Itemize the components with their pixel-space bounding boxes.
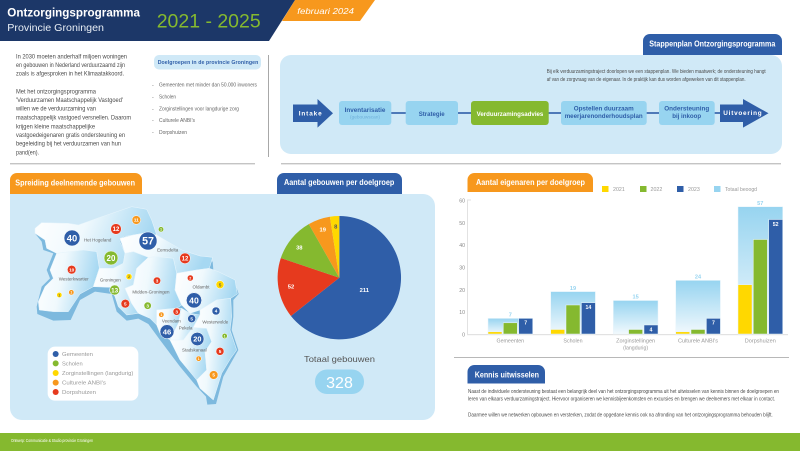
region: Westerwolde [193,298,237,400]
intro text: 'Verduurzamen Maatschappelijk Vastgoed' [16,98,123,104]
region: Westerkwartier [38,250,99,312]
arrow: uitvoering [720,99,768,128]
bars: gemeenten [488,312,533,334]
tab: aantal gebouwen heading: Aantal gebouwen per doelgroep [284,178,395,187]
tab: spreiding heading [10,173,142,194]
region: Pekela [170,308,200,340]
bars: culturele ANBI's [676,275,720,334]
step: onderhoudsplan: Opstellen duurzaam [574,106,634,112]
bars: culturele ANBI's: 24 [695,275,702,281]
doelgroepen list: - [152,95,154,101]
y axis: 40 [459,243,465,249]
y axis: 20 [459,288,465,294]
step: strategie [406,101,458,125]
map labels: Westerkwartier [59,277,89,282]
bars: dorpshuizen: 52 [773,222,779,228]
map marker numbers: 1 [160,313,162,317]
region: Oldambt [175,268,237,313]
map marker numbers: 2 [189,276,191,280]
panel: doelgroepen heading: Doelgroepen in de provincie Groningen [158,60,258,66]
map markers: gemeenten [64,230,220,346]
step: inventarisatie: (gebouwscan) [350,115,380,121]
total buildings value [315,370,364,394]
intro text: vastgoedeigenaren gratis ondersteuning en [16,133,125,139]
total buildings label: Totaal gebouwen [304,354,375,364]
kennis uitwisselen text [468,389,779,419]
region: Groningen [93,252,148,315]
map labels: Het Hogeland [84,238,112,243]
map marker numbers: 40 [67,233,77,243]
tab: stappenplan heading: Stappenplan Ontzorgingsprogramma [649,40,776,48]
doelgroepen list: Gemeenten met minder dan 50.000 inwoners [159,83,257,89]
map markers: zorginstellingen [57,274,224,298]
doelgroepen list: - [152,83,154,89]
intro text [15,54,131,156]
region: Het Hogeland [35,207,157,268]
map marker numbers: 5 [212,373,215,378]
category labels [496,338,776,352]
map markers: dorpshuizen [67,224,224,355]
doelgroepen list: - [152,130,154,136]
category labels: Dorpshuizen [745,338,776,344]
map labels: Midden-Groningen [132,289,170,294]
chart legend: 2022 [650,187,662,193]
step: inventarisatie [339,101,391,125]
bars: zorginstellingen [613,295,658,334]
pie chart: 19 [319,227,327,233]
step: inventarisatie: Inventarisatie [345,107,386,114]
y axis: 10 [459,310,465,316]
doelgroepen list: Scholen [159,95,176,101]
bars: gemeenten: 7 [524,320,527,326]
y axis: 50 [459,221,465,227]
tab: aantal gebouwen heading [277,173,402,194]
map marker numbers: 4 [215,309,218,314]
map labels: Stadskanaal [182,348,207,353]
bars: scholen: 14 [586,305,591,311]
intro text: willen we de verduurzaming van [15,107,96,113]
tab: aantal eigenaren heading: Aantal eigenaren per doelgroep [476,178,585,187]
bars: zorginstellingen: 15 [632,295,639,301]
doelgroepen list: Culturele ANBI's [159,118,195,124]
map legend: Culturele ANBI's [62,381,106,387]
pie chart: 211 [360,288,370,294]
map marker numbers: 13 [111,287,119,294]
bars: scholen [551,286,595,334]
doelgroepen list: - [152,118,154,124]
panel: map and pie background [10,194,435,420]
intro text: In 2030 moeten anderhalf miljoen woningen [16,54,127,60]
map labels [59,238,229,353]
step: verduurzamingsadvies [471,101,549,125]
map legend: Dorpshuizen [62,390,96,396]
chart legend: 2021 [613,187,625,193]
map marker numbers [58,218,226,378]
stappenplan description: Bij elk verduurzamingstraject doorlopen we een stappenplan. We bieden maatwerk; de ondersteuning hangt [547,69,766,75]
map legend: Scholen [62,361,83,367]
y axis [459,198,465,338]
map markers: culturele ANBI's [69,216,218,379]
doelgroepen list: Dorpshuizen [159,130,187,136]
map marker numbers: 40 [189,295,199,305]
map marker numbers: 5 [124,301,127,306]
kennis uitwisselen text: Naast de individuele ondersteuning bestaat een belangrijk deel van het ontzorgingsprogramma uit het uitwisselen van kennis binnen de doelgroepen en [468,389,779,395]
map labels: Oldambt [193,284,210,289]
map marker numbers: 57 [142,236,154,248]
kennis uitwisselen text: leren van elkaars verduurzamingstraject. Hiervoor organiseren we kennisbijeenkomsten en excursies en brengen we deelnemers met elkaar in contact. [468,397,775,403]
map marker numbers: 20 [107,254,116,263]
chart legend [602,186,757,193]
map marker numbers: 1 [198,357,200,361]
map marker numbers: 1 [70,291,72,295]
y axis: 0 [462,332,465,338]
map marker numbers: 1 [224,334,226,338]
map marker numbers: 1 [160,228,162,232]
map marker numbers: 46 [163,327,171,336]
map marker numbers: 5 [219,282,222,287]
kennis uitwisselen text: Daarmee willen we netwerken opbouwen en versterken, zodat de opgedane kennis ook na afronding van het ontzorgingsprogramma behouden blijft. [468,413,773,419]
bars: culturele ANBI's: 7 [712,320,715,326]
map marker numbers: 11 [134,218,139,224]
step: ondersteuning: Ondersteuning [664,106,709,112]
map legend: Zorginstellingen (langdurig) [62,371,133,377]
step: verduurzamingsadvies: Verduurzamingsadvies [477,111,544,118]
map marker numbers: 3 [175,309,178,314]
pie chart: 8 [334,225,338,231]
doelgroepen list: - [152,106,154,112]
map markers: scholen [104,227,227,339]
map labels: Eemsdelta [157,247,179,252]
title: Ontzorgingsprogramma [7,8,141,20]
header banner [0,0,375,41]
map legend [48,347,138,401]
subtitle: Provincie Groningen [7,22,104,34]
category labels: Gemeenten [496,338,524,344]
step: strategie: Strategie [419,111,445,118]
step: ondersteuning [659,101,715,125]
category labels: Scholen [563,338,583,344]
map marker numbers: 10 [69,267,75,272]
y axis: 30 [459,266,465,272]
intro text: zoals is afgesproken in het Klimaatakkoord. [16,72,124,78]
intro text: en gebouwen in Nederland verduurzaamd zijn [16,63,125,69]
map marker numbers: 5 [219,349,222,354]
region: Eemsdelta [120,233,213,273]
map marker numbers: 3 [146,303,149,308]
stappenplan description: af van de zorgvraag van de eigenaar. In de praktijk kan dus worden afgeweken van dit stappenplan. [547,77,746,83]
step: onderhoudsplan: meerjarenonderhoudsplan [565,113,643,120]
tab: kennis uitwisselen heading: Kennis uitwisselen [475,371,539,380]
map marker numbers: 5 [190,316,193,321]
doelgroepen list [152,83,257,136]
footer: Ontwerp: Communicatie & Studio provincie Groningen [11,438,93,444]
footer [0,433,800,451]
step: onderhoudsplan [561,101,647,125]
map marker numbers: 20 [193,335,201,344]
chart legend: 2023 [688,187,700,193]
arrow: intake [293,99,333,128]
chart legend: Totaal beoogd [725,187,757,193]
map labels: Westerwolde [202,319,229,324]
intro text: maatschappelijk vastgoed versnellen. Daarom [16,115,131,121]
intro text: Met het ontzorgingsprogramma [16,89,97,95]
map labels: Veendam [162,318,181,323]
bars: dorpshuizen: 57 [757,201,763,207]
panel: doelgroepen heading [154,55,261,70]
years: 2021 - 2025 [157,10,261,32]
pie chart: 38 [296,246,303,252]
map of Groningen [35,207,239,405]
panel: stappenplan [280,34,782,154]
intro text: pand(en). [16,150,39,156]
bars: scholen: 19 [570,286,576,292]
tab: stappenplan heading [643,34,782,55]
stappenplan description [547,69,766,83]
bars: gemeenten: 7 [509,312,512,318]
category labels: Culturele ANBI's [678,338,718,344]
total buildings value: 328 [326,375,353,392]
bar chart [459,198,788,352]
map marker numbers: 1 [58,293,60,297]
arrow: uitvoering: Uitvoering [723,110,762,117]
pie chart: 52 [288,285,294,291]
category labels: (langdurig) [623,346,648,352]
bars: zorginstellingen: 4 [650,328,653,334]
tab: spreiding heading: Spreiding deelnemende gebouwen [15,178,135,187]
intro text: begeleiding bij het verduurzamen van hun [16,142,121,148]
map marker numbers: 12 [113,227,120,233]
tab: aantal eigenaren heading [468,173,593,192]
pie chart [278,216,401,339]
map labels: Pekela [179,326,193,331]
date: februari 2024 [297,6,354,16]
tab: kennis uitwisselen heading [468,365,545,384]
map legend: Gemeenten [62,352,93,358]
map marker numbers: 3 [156,278,159,283]
doelgroepen list: Zorginstellingen voor langdurige zorg [159,106,239,112]
region: Midden-Groningen [125,257,182,325]
step: ondersteuning: bij inkoop [672,113,701,120]
arrow: intake: Intake [299,111,322,118]
category labels: Zorginstellingen [616,338,655,344]
map shadow [35,213,239,405]
y axis: 60 [459,198,465,204]
map marker numbers: 12 [182,256,189,262]
map marker numbers: 2 [128,275,130,279]
region: Veendam [157,308,182,340]
intro text: krijgen kleine maatschappelijke [16,124,96,130]
map labels: Groningen [100,277,121,282]
bars: dorpshuizen [738,201,783,334]
region: Stadskanaal [170,327,212,380]
